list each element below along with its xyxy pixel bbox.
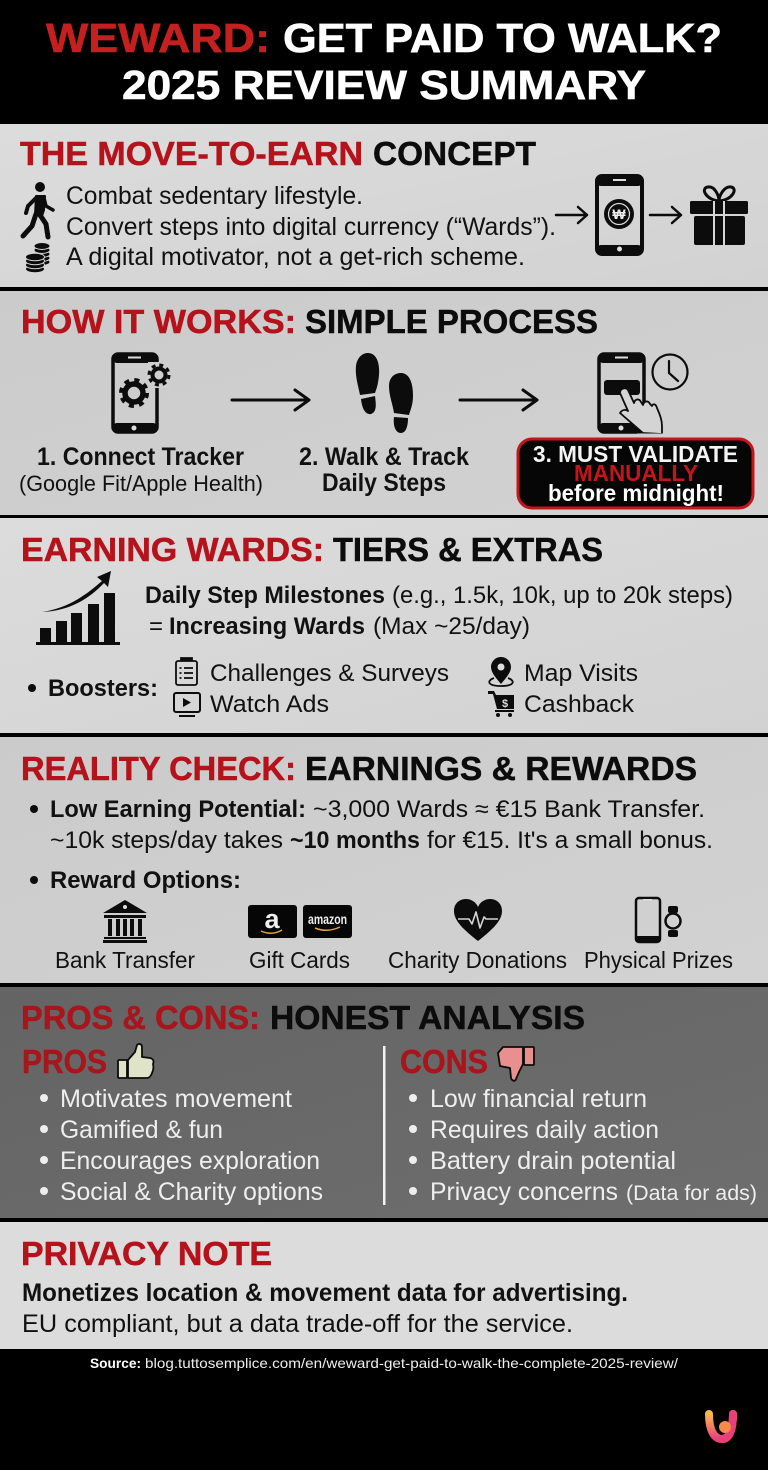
- icon: phone with ward coin: [597, 176, 642, 254]
- booster: cashback: Cashback: [524, 691, 635, 718]
- daily milestones text: (e.g., 1.5k, 10k, up to 20k steps): [392, 582, 733, 609]
- booster: map visits: Map Visits: [524, 660, 638, 687]
- reward: charity donations: Charity Donations: [388, 947, 567, 973]
- heading: how it works: [21, 303, 598, 340]
- title: GET PAID TO WALK?: [283, 15, 722, 61]
- reward: bank transfer: [55, 900, 195, 973]
- daily milestones text: Increasing Wards: [169, 613, 365, 640]
- heading: move-to-earn concept: THE MOVE-TO-EARN: [20, 135, 363, 172]
- icon: cashback cart: [488, 691, 514, 717]
- privacy text: EU compliant, but a data trade-off for the service.: [22, 1310, 573, 1338]
- pros list: Social & Charity options: [60, 1178, 323, 1206]
- arrow: steps to phone: [556, 207, 587, 223]
- icon: coin stack: [26, 242, 50, 273]
- daily milestones text: Daily Step Milestones: [145, 582, 385, 609]
- panel: the move-to-earn concept: [0, 124, 768, 287]
- heading: reality check: EARNINGS & REWARDS: [305, 750, 697, 787]
- privacy text: [22, 1279, 628, 1338]
- daily milestones text: =: [149, 613, 163, 640]
- reward: physical prizes: Physical Prizes: [584, 947, 733, 973]
- heading: pros and cons: HONEST ANALYSIS: [270, 999, 585, 1036]
- icon: growth chart: [36, 571, 120, 645]
- concept text: [66, 182, 556, 271]
- cons list: Battery drain potential: [430, 1147, 676, 1175]
- low earning potential text: ~10 months: [290, 827, 420, 854]
- icon: phone tap with clock: [599, 354, 688, 438]
- icon: thumbs down: [498, 1047, 534, 1081]
- cons heading: CONS: [400, 1043, 488, 1080]
- daily milestones text: (Max ~25/day): [373, 613, 530, 640]
- heading: earning wards: [21, 531, 603, 568]
- icon: clipboard: [176, 658, 197, 685]
- heading: move-to-earn concept: CONCEPT: [373, 135, 536, 172]
- reward: gift cards: Gift Cards: [249, 947, 350, 973]
- booster: watch ads: Watch Ads: [210, 691, 329, 718]
- heading: how it works: HOW IT WORKS:: [21, 303, 296, 340]
- low earning potential text: Low Earning Potential:: [50, 796, 306, 823]
- reward options label: Reward Options:: [50, 867, 241, 894]
- concept text: A digital motivator, not a get-rich scheme.: [66, 243, 525, 271]
- callout: must validate manually: 3. MUST VALIDATE: [533, 441, 738, 467]
- concept text: Convert steps into digital currency (“Wards”).: [66, 213, 556, 241]
- low earning potential text: ~3,000 Wards ≈ €15 Bank Transfer.: [313, 796, 705, 823]
- reward: charity donations: [388, 899, 567, 973]
- reward: bank transfer: Bank Transfer: [55, 947, 195, 973]
- panel: reality check: [0, 737, 768, 983]
- boosters label: Boosters:: [48, 675, 158, 702]
- source line: blog.tuttosemplice.com/en/weward-get-paid-to-walk-the-complete-2025-review/: [145, 1355, 678, 1371]
- pros list: Gamified & fun: [60, 1116, 223, 1144]
- icon: walking person: [23, 182, 53, 237]
- icon: footprints: [356, 353, 413, 433]
- icon: video screen: [174, 693, 200, 717]
- icon: cashback cart: $: [502, 698, 508, 710]
- daily milestones text: [145, 582, 733, 640]
- arrow: phone to gift: [650, 207, 681, 223]
- step 1 label: [19, 443, 263, 496]
- privacy text: Monetizes location & movement data for advertising.: [22, 1279, 628, 1307]
- icon: gift box: [690, 187, 748, 245]
- arrow: step 1 to step 2: [232, 390, 309, 410]
- heading: earning wards: TIERS & EXTRAS: [333, 531, 603, 568]
- source line: Source:: [90, 1355, 141, 1371]
- logo: [709, 1414, 733, 1439]
- title: WEWARD:: [46, 15, 270, 61]
- heading: pros and cons: [21, 999, 585, 1036]
- title: 2025 REVIEW SUMMARY: [122, 62, 646, 108]
- cons list: (Data for ads): [626, 1182, 757, 1205]
- heading: reality check: REALITY CHECK:: [21, 750, 296, 787]
- panel: earning wards: [0, 518, 768, 733]
- concept text: Combat sedentary lifestyle.: [66, 182, 363, 210]
- panel: privacy note: [0, 1222, 768, 1349]
- icon: phone with gears: [113, 354, 170, 433]
- callout: must validate manually: MANUALLY: [574, 460, 698, 486]
- pros list: Encourages exploration: [60, 1147, 320, 1175]
- panel: how it works: [0, 291, 768, 515]
- reward: gift cards: [248, 904, 352, 973]
- low earning potential text: ~10k steps/day takes: [50, 827, 283, 854]
- low earning potential text: for €15. It's a small bonus.: [427, 827, 713, 854]
- callout: must validate manually: [518, 439, 753, 508]
- reward: gift cards: amazon: [308, 911, 347, 927]
- step 1 label: 1. Connect Tracker: [37, 443, 244, 471]
- column divider: [383, 1046, 386, 1205]
- step 2 label: Daily Steps: [322, 469, 446, 497]
- heading: how it works: SIMPLE PROCESS: [305, 303, 598, 340]
- heading: privacy note: PRIVACY NOTE: [21, 1235, 272, 1272]
- callout: must validate manually: before midnight!: [548, 480, 724, 506]
- heading: move-to-earn concept: [20, 135, 536, 172]
- icon: map pin: [489, 657, 513, 686]
- cons list: Low financial return: [430, 1085, 647, 1113]
- panel: pros and cons: [0, 987, 768, 1218]
- icon: thumbs up: [118, 1044, 154, 1078]
- pros list: Motivates movement: [60, 1085, 292, 1113]
- cons list: Requires daily action: [430, 1116, 659, 1144]
- booster: challenges and surveys: Challenges & Surveys: [210, 660, 449, 687]
- step 2 label: [299, 443, 469, 497]
- reward: physical prizes: [584, 898, 733, 973]
- title: [46, 15, 722, 108]
- reward: gift cards: a: [264, 904, 280, 934]
- step 1 label: (Google Fit/Apple Health): [19, 471, 263, 496]
- heading: pros and cons: PROS & CONS:: [21, 999, 260, 1036]
- pros list: [40, 1085, 323, 1206]
- step 2 label: 2. Walk & Track: [299, 443, 469, 471]
- heading: reality check: [21, 750, 697, 787]
- low earning potential text: [30, 796, 713, 854]
- cons list: Privacy concerns: [430, 1178, 618, 1206]
- cons list: [409, 1085, 757, 1206]
- arrow: step 2 to step 3: [460, 390, 537, 410]
- icon: phone with ward coin: ₩: [612, 206, 626, 222]
- pros heading: PROS: [22, 1043, 107, 1080]
- heading: earning wards: EARNING WARDS:: [21, 531, 324, 568]
